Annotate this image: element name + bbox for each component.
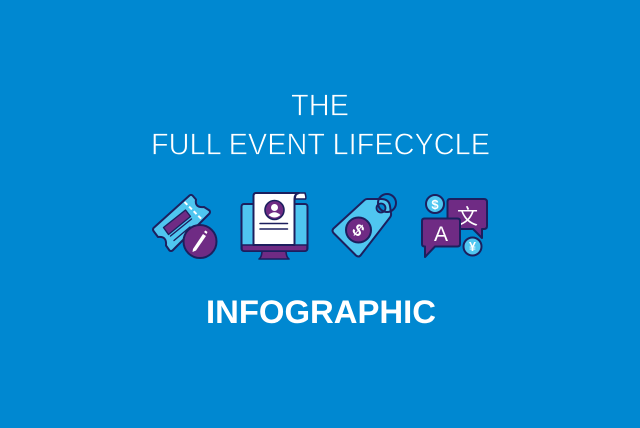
icon: translation speech bubbles and coins: [422, 195, 487, 257]
subtitle: INFOGRAPHIC: [206, 294, 436, 330]
icon: translation speech bubbles and coins: $: [431, 197, 439, 212]
title: [151, 88, 490, 162]
title: THE: [291, 88, 349, 122]
icon: translation speech bubbles and coins: 文: [457, 206, 478, 229]
icon: translation speech bubbles and coins: ¥: [469, 240, 476, 254]
icon: ticket with pencil: [153, 195, 216, 258]
title: FULL EVENT LIFECYCLE: [151, 126, 490, 162]
icon: translation speech bubbles and coins: A: [434, 223, 448, 246]
icon: price tag: $: [348, 220, 368, 241]
icon: price tag: [332, 194, 396, 256]
icon: monitor with document: [242, 193, 308, 259]
